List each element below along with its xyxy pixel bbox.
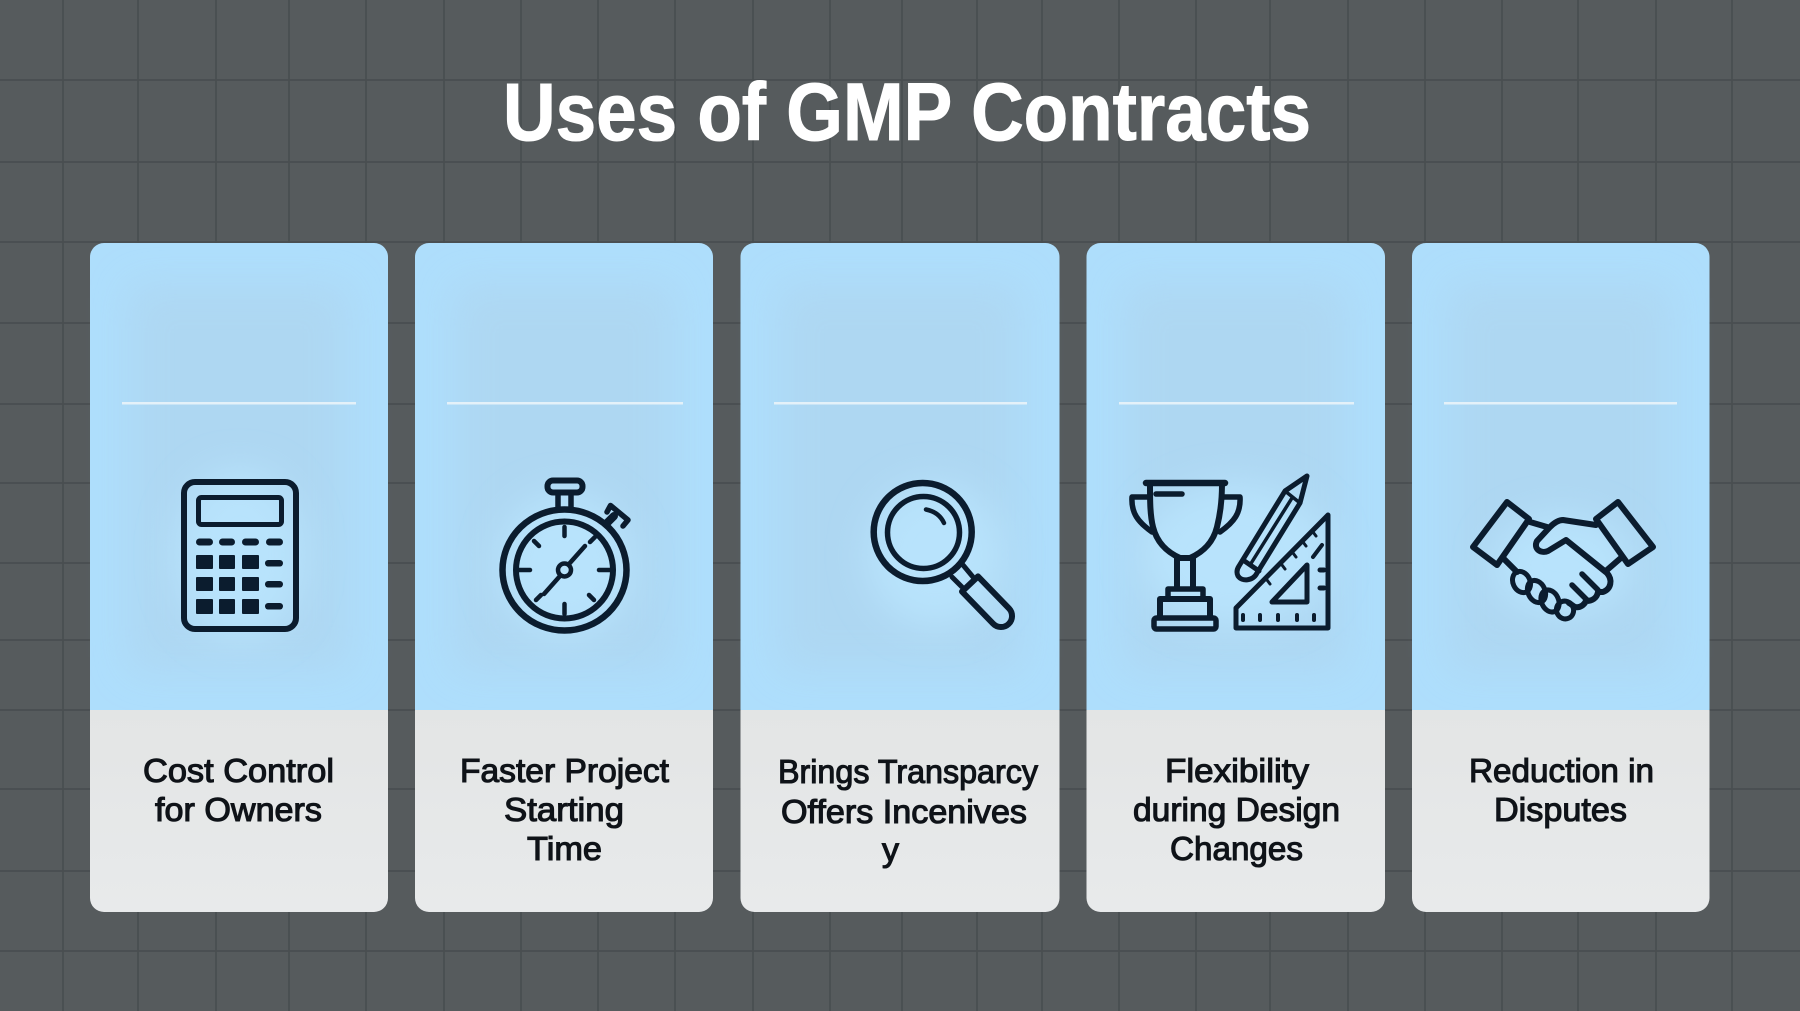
panel bottom: grey (90, 710, 388, 912)
label: reduction in disputes (1469, 752, 1654, 828)
panel bottom: grey (1412, 710, 1710, 912)
icon: magnifying glass (874, 483, 1012, 627)
label: brings transparency, offers incentives: Brings Transparcy (778, 753, 1038, 790)
panel top: blue (1412, 243, 1710, 710)
label: flexibility during design changes: Flexibility (1165, 752, 1310, 789)
icon: pencil (1237, 476, 1307, 580)
icon: stopwatch (502, 480, 628, 630)
icon: trophy (1132, 483, 1240, 629)
label: cost control for owners: Cost Control (143, 752, 334, 789)
panel bottom: grey (740, 710, 1060, 912)
icon: set square (1236, 515, 1328, 628)
panel: reduction in disputes (1412, 243, 1710, 912)
label: cost control for owners: for Owners (155, 791, 322, 828)
panel bottom: grey (1086, 710, 1385, 912)
panel: cost control for owners (90, 243, 388, 912)
panel: flexibility during design changes (1086, 243, 1385, 912)
label: faster project starting time: Faster Project (460, 752, 669, 789)
panel: faster project starting time (415, 243, 713, 912)
label: brings transparency, offers incentives: Offers Incenives (781, 793, 1027, 830)
panel top: blue (1086, 243, 1385, 710)
label: flexibility during design changes: Changes (1170, 830, 1303, 867)
label: cost control for owners (143, 752, 334, 828)
label: reduction in disputes: Disputes (1494, 791, 1627, 828)
panel top: blue (740, 243, 1060, 710)
title: Uses of GMP Contracts (503, 67, 1311, 158)
panel: transparency and incentives (740, 243, 1060, 912)
panel top: blue (415, 243, 713, 710)
label: faster project starting time: Starting (504, 791, 624, 828)
panel bottom: grey (415, 710, 713, 912)
label: faster project starting time: Time (527, 830, 602, 867)
icon: calculator (184, 482, 296, 629)
label: brings transparency, offers incentives (778, 753, 1038, 868)
label: flexibility during design changes: during Design (1133, 791, 1340, 828)
label: reduction in disputes: Reduction in (1469, 752, 1654, 789)
label: brings transparency, offers incentives: y (882, 831, 900, 868)
panel top: blue (90, 243, 388, 710)
label: flexibility during design changes (1133, 752, 1340, 867)
label: faster project starting time (460, 752, 669, 867)
icon: handshake (1473, 502, 1653, 622)
